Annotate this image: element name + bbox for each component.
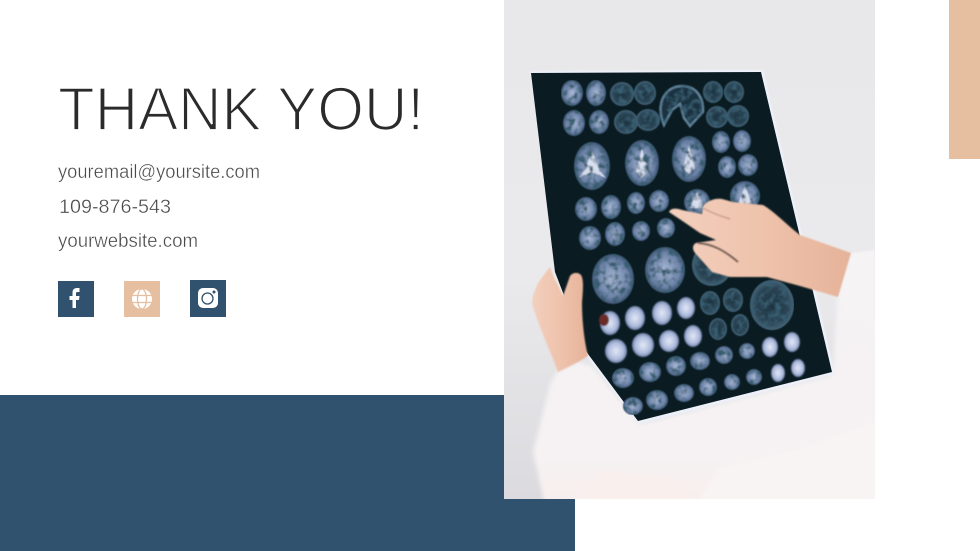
icon: globe xyxy=(124,281,160,317)
scan sheet xyxy=(530,70,835,424)
navy band xyxy=(0,395,575,551)
website: yourwebsite.com xyxy=(58,231,198,252)
icon: instagram xyxy=(190,280,226,317)
icon: facebook xyxy=(58,281,94,317)
brain scans xyxy=(561,80,794,415)
phone: 109-876-543 xyxy=(59,197,171,218)
title: THANK YOU! xyxy=(58,75,424,143)
email: youremail@yoursite.com xyxy=(58,162,260,183)
right hand xyxy=(669,199,851,297)
left hand xyxy=(532,267,588,372)
clothing xyxy=(532,300,875,499)
finger shadows xyxy=(698,208,738,262)
photo: hands holding a brain scan xyxy=(504,0,895,520)
right sleeve xyxy=(840,250,875,318)
peach corner block xyxy=(949,0,980,159)
